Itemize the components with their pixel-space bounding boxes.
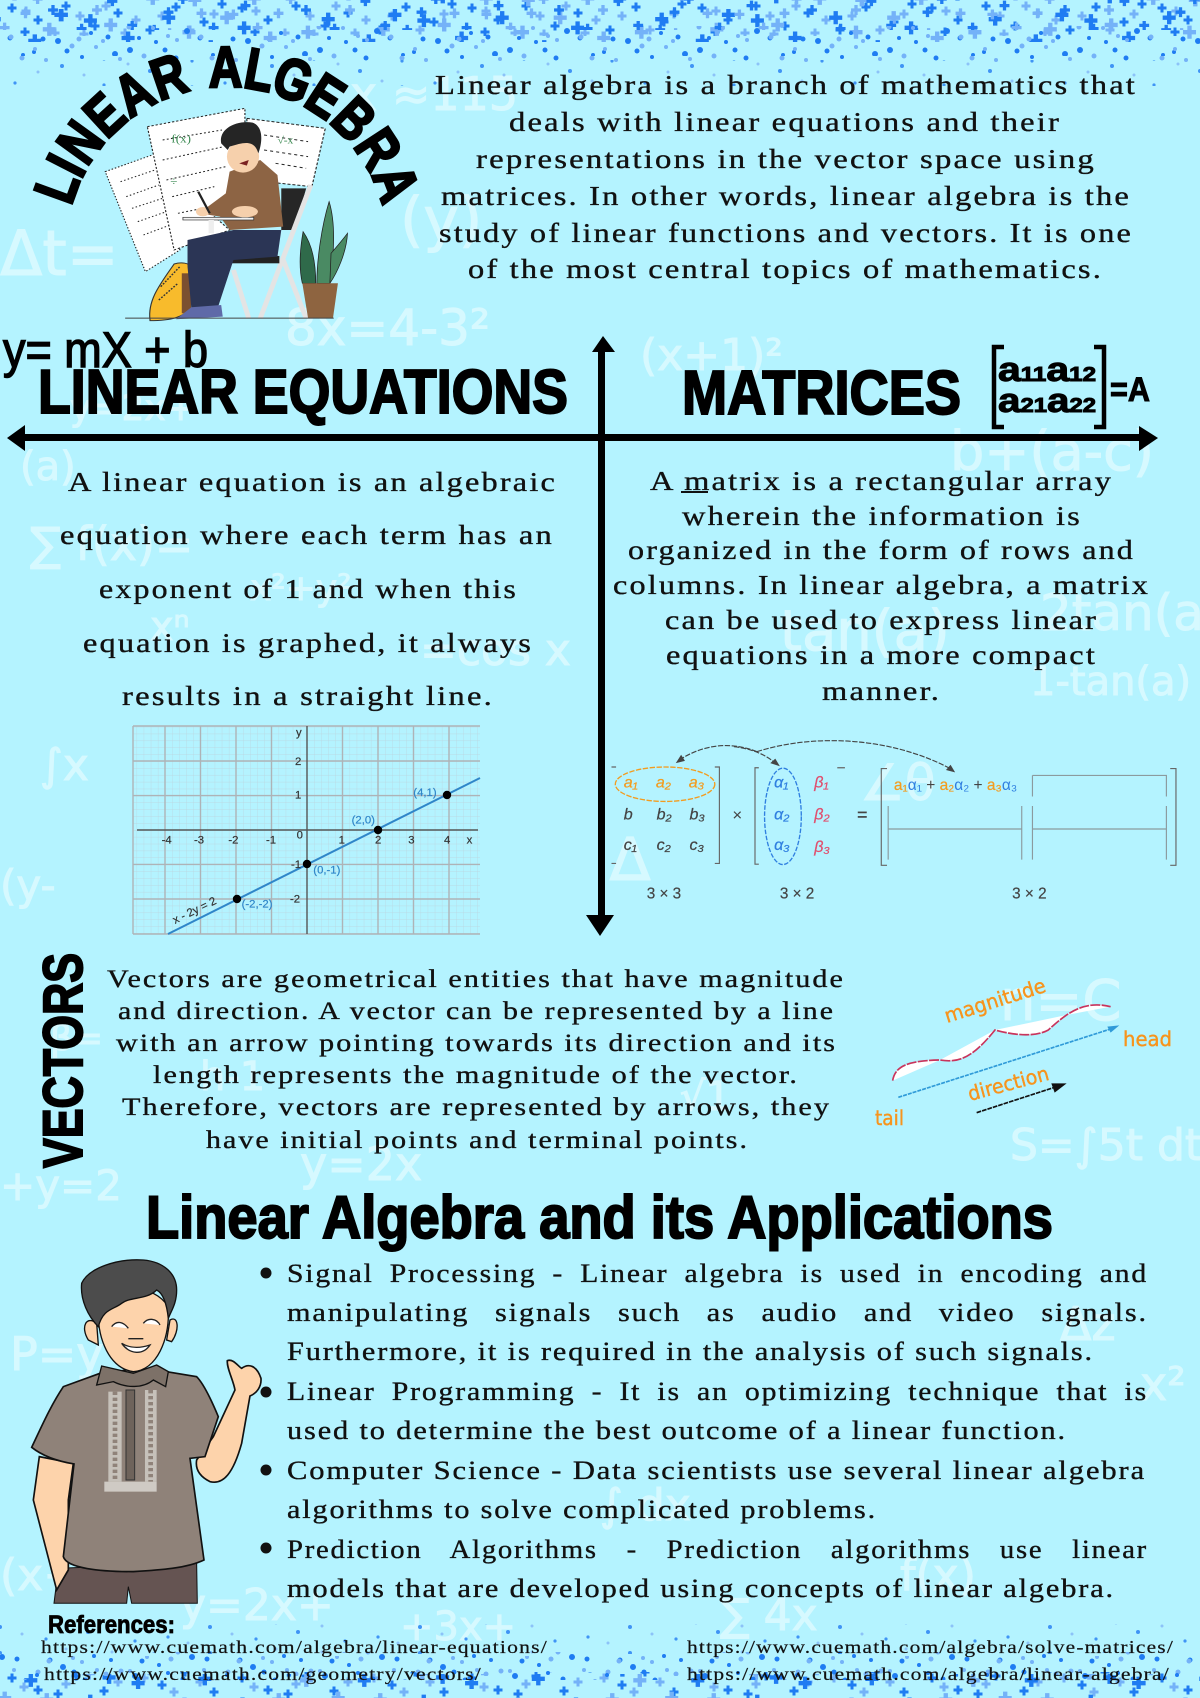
intro paragraph: matrices. In other words, linear algebra is the [441, 181, 1131, 211]
chart: line graph x-2y=2: (2,0) [352, 814, 375, 826]
background: faint handwritten math formulas: +3x+ [400, 1604, 516, 1650]
intro paragraph: study of linear functions and vectors. It is one [439, 218, 1133, 248]
chart: line graph x-2y=2: -1 [266, 834, 276, 846]
background: faint handwritten math formulas: (y) [400, 185, 482, 255]
background: faint handwritten math formulas: S=∫5t dt [1010, 1120, 1200, 1171]
illustration: smiling man thumbs up [32, 1260, 261, 1603]
bullet: signal processing: Furthermore, it is required in the analysis of such signals. [287, 1337, 1094, 1366]
background: faint handwritten math formulas: ∑ f(x)= [30, 517, 193, 571]
background: faint handwritten math formulas: b+(a-c) [950, 420, 1154, 483]
ears [85, 1319, 177, 1345]
paper: right sheet [247, 118, 325, 187]
plant [300, 202, 347, 318]
paragraph: matrix definition: can be used to express linear [665, 605, 1098, 635]
paragraph: linear equation definition: A linear equation is an algebraic [68, 467, 557, 497]
heading: linear equations: LINEAR EQUATIONS [38, 358, 568, 427]
background: faint handwritten math formulas: Δz [1060, 1297, 1116, 1351]
dimension labels: 3 × 3 [647, 886, 681, 903]
matrix: 3x3: b₂ [657, 805, 672, 823]
matrix: result: a₁α₁ + a₂α₂ + a₃α₃ [894, 776, 1017, 794]
matrix: 3x3: c₁ [624, 836, 637, 854]
bullet: signal processing [260, 1259, 1148, 1366]
paper: left sheet [105, 154, 180, 272]
title: curved LINEAR ALGEBRA: G [264, 43, 322, 117]
diagram: matrix multiplication [611, 741, 1176, 903]
background: faint handwritten math formulas: n=C [1000, 969, 1122, 1034]
background: faint handwritten math formulas: xⁿ [150, 604, 190, 650]
ground line [125, 317, 334, 320]
dimension labels [647, 886, 1047, 903]
background: faint handwritten math formulas: (x+1)² [640, 330, 783, 381]
intro paragraph: of the most central topics of mathematics. [468, 254, 1103, 284]
paragraph: vectors definition: have initial points and terminal points. [206, 1127, 749, 1154]
chart: line graph x-2y=2: -4 [162, 834, 172, 846]
title: curved LINEAR ALGEBRA: R [143, 41, 195, 113]
title: curved LINEAR ALGEBRA: E [71, 81, 138, 150]
decoration: bottom speckle band [0, 1624, 1200, 1698]
formula: matrix equals A: =A [1110, 371, 1150, 409]
matrix: 3x3 [611, 767, 719, 863]
paragraph: vectors definition: Vectors are geometrical entities that have magnitude [107, 966, 845, 993]
background: faint handwritten math formulas: =cos x [420, 625, 571, 676]
background: faint handwritten math formulas: β= [50, 1018, 103, 1059]
references heading: References: [48, 1611, 175, 1639]
matrix: 3x3: b [624, 805, 633, 823]
shirt [32, 1368, 218, 1572]
bullet: signal processing: Signal Processing - Linear algebra is used in encoding and [287, 1259, 1148, 1288]
formula: matrix equals A: a21a22 [998, 382, 1096, 420]
formula: y = mx + b: y= mX + b [3, 322, 208, 378]
paragraph: matrix definition: columns. In linear algebra, a matrix [613, 570, 1150, 600]
matrix: 3x3: a₂ [656, 774, 671, 792]
matrix: 3x2 [755, 768, 845, 865]
paragraph: vectors definition: Therefore, vectors are represented by arrows, they [122, 1094, 831, 1121]
background: faint handwritten math formulas: ∫x [40, 740, 89, 791]
vector arrow [898, 1029, 1112, 1097]
chart: line graph x-2y=2: -1 [291, 859, 301, 871]
background: faint handwritten math formulas: ∑ 4x [720, 1590, 818, 1641]
matrix: 3x2: β₁ [813, 774, 829, 792]
chart: line graph x-2y=2: 0 [297, 830, 303, 842]
title: curved LINEAR ALGEBRA: R [342, 117, 414, 181]
background: faint handwritten math formulas: ∫ dx [600, 1480, 691, 1531]
title: curved LINEAR ALGEBRA: E [295, 61, 356, 132]
chart: line graph x-2y=2: (0,-1) [313, 864, 341, 876]
matrix: 3x2: β₂ [813, 805, 830, 823]
chart: line graph x-2y=2: 2 [295, 756, 301, 768]
arrow: vertical axis [586, 336, 615, 936]
backpack [150, 263, 191, 321]
equals sign: = [857, 805, 867, 825]
face [98, 1289, 168, 1372]
bullet: prediction algorithms: models that are developed using concepts of linear algebra. [287, 1574, 1115, 1603]
references links: https://www.cuemath.com/algebra/linear-equations/ [41, 1637, 548, 1657]
bullet: linear programming: used to determine the best outcome of a linear function. [287, 1416, 1067, 1445]
background: faint handwritten math formulas: ∠θ [860, 754, 935, 812]
background: faint handwritten math formulas: h-1 [200, 1054, 265, 1100]
references links [41, 1637, 1174, 1684]
illustration: student at desk with papers and plant [105, 108, 347, 321]
matrix: 3x3: a₁ [624, 774, 638, 792]
paragraph: linear equation definition: equation is graphed, it always [83, 628, 533, 658]
background: faint handwritten math formulas: tan(a) [780, 599, 950, 664]
paragraph: matrix definition: A matrix is a rectangular array [650, 466, 1113, 496]
title: curved LINEAR ALGEBRA: N [45, 110, 117, 175]
chart: line graph x-2y=2: 3 [408, 834, 415, 846]
intro paragraph: representations in the vector space using [476, 144, 1096, 174]
bullet: signal processing: manipulating signals such as audio and video signals. [287, 1298, 1148, 1327]
chart: line graph x-2y=2: -3 [194, 834, 204, 846]
paragraph: vectors definition [107, 966, 845, 1154]
title: curved LINEAR ALGEBRA: B [319, 85, 388, 155]
chart: line graph x-2y=2: y [296, 727, 302, 739]
magnitude curve [893, 1005, 1111, 1081]
paragraph: matrix definition: equations in a more compact [666, 640, 1097, 670]
chart: line graph x-2y=2: (4,1) [413, 787, 437, 799]
background: faint handwritten math formulas: (a) [20, 444, 76, 490]
background: faint handwritten math formulas: +y=2 [0, 1161, 122, 1210]
title: curved LINEAR ALGEBRA: L [22, 162, 93, 211]
background: faint handwritten math formulas: 1-tan(a) [1030, 659, 1191, 705]
chart: line graph x-2y=2: 2 [375, 834, 381, 846]
smile and eyes [112, 1319, 160, 1352]
diagram: vector magnitude and direction: head [1123, 1027, 1172, 1051]
collar [97, 1365, 168, 1387]
bullet: computer science: Computer Science - Data scientists use several linear algebra [287, 1456, 1146, 1485]
intro paragraph: deals with linear equations and their [509, 107, 1061, 137]
chair [232, 185, 311, 318]
heading: vectors (vertical): VECTORS [31, 953, 94, 1168]
paper: centre sheet: f(x) [171, 132, 191, 145]
trousers [188, 230, 281, 308]
bullet: prediction algorithms [260, 1535, 1148, 1603]
paragraph: matrix definition: organized in the form of rows and [628, 535, 1135, 565]
paragraph: linear equation definition: equation where each term has an [60, 520, 554, 550]
paragraph: vectors definition: and direction. A vector can be represented by a line [118, 998, 835, 1025]
arrow: horizontal axis [7, 425, 1158, 451]
diagram: vector magnitude and direction: magnitude [941, 973, 1049, 1028]
list: applications bullets [260, 1259, 1148, 1603]
background: faint handwritten math formulas: y=2x+ [180, 1580, 334, 1631]
bullet: linear programming [260, 1377, 1148, 1445]
chart: line graph x-2y=2 [133, 726, 480, 934]
dimension labels: 3 × 2 [1012, 886, 1047, 903]
diagram: vector magnitude and direction: direction [965, 1061, 1051, 1106]
head [221, 122, 261, 173]
background: faint handwritten math formulas: ∆ [609, 825, 651, 895]
background: faint handwritten math formulas: x ≈115 [350, 67, 518, 121]
background: faint handwritten math formulas: y=2x+ [70, 388, 196, 429]
bullet: computer science: algorithms to solve complicated problems. [287, 1495, 877, 1524]
paper: right sheet: √-x [277, 135, 294, 146]
matrix: 3x2: α₃ [774, 836, 790, 854]
chart: line graph x-2y=2: (-2,-2) [242, 898, 273, 910]
paragraph: vectors definition: length represents the magnitude of the vector. [153, 1062, 799, 1089]
background: faint handwritten math formulas: √1 [680, 1074, 731, 1120]
matrix: 3x3: c₂ [657, 836, 671, 854]
title: curved LINEAR ALGEBRA: A [208, 35, 242, 100]
decoration: top speckle band [0, 0, 1200, 86]
background: faint handwritten math formulas: f(x) [900, 1550, 976, 1601]
background: faint handwritten math formulas: (x+ [0, 1550, 80, 1601]
formula: matrix equals A [994, 347, 1150, 427]
paragraph: vectors definition: with an arrow pointing towards its direction and its [116, 1030, 837, 1057]
diagram: vector magnitude and direction: tail [875, 1106, 904, 1130]
heading: matrices: MATRICES [682, 359, 961, 428]
title: curved LINEAR ALGEBRA: L [240, 36, 279, 105]
heading: applications: Linear Algebra and its Applications [146, 1184, 1053, 1251]
paragraph: linear equation definition: results in a straight line. [122, 681, 494, 711]
title: curved LINEAR ALGEBRA [22, 35, 432, 211]
desk and hands [183, 192, 258, 233]
matrix: 3x2: α₂ [774, 805, 789, 823]
paragraph: matrix definition [613, 466, 1150, 706]
paragraph: matrix definition: manner. [822, 676, 941, 706]
matrix: 3x2: α₁ [774, 774, 788, 792]
chart: line graph x-2y=2: 4 [444, 834, 450, 846]
chart: line graph x-2y=2: -2 [228, 834, 238, 846]
background: faint handwritten math formulas: P=y [10, 1327, 104, 1381]
embroidery and placket [104, 1390, 157, 1492]
background: faint handwritten math formulas: x²+y² [250, 568, 352, 609]
paper: centre sheet [147, 108, 245, 250]
formula: matrix equals A: a11a12 [998, 351, 1096, 389]
references links: https://www.cuemath.com/algebra/linear-algebra/ [687, 1664, 1170, 1684]
background: faint handwritten math formulas: y=2x [300, 1137, 422, 1191]
references links: https://www.cuemath.com/geometry/vectors/ [44, 1664, 482, 1684]
chart: line graph x-2y=2: x [467, 834, 473, 846]
matrix: 3x3: b₃ [690, 805, 705, 823]
paragraph: matrix definition: wherein the information is [682, 501, 1082, 531]
hair [81, 1260, 177, 1327]
background: faint handwritten math formulas: (y- [0, 861, 56, 910]
background: faint handwritten math formulas: x² [1140, 1357, 1186, 1411]
matrix: 3x2: β₃ [813, 838, 830, 856]
left arm [33, 1457, 73, 1590]
bullet: prediction algorithms: Prediction Algorithms - Prediction algorithms use linear [287, 1535, 1148, 1564]
diagram: vector magnitude and direction [875, 973, 1172, 1130]
chart: line graph x-2y=2: -2 [290, 894, 300, 906]
intro paragraph: Linear algebra is a branch of mathematics that [435, 70, 1137, 100]
trousers [54, 1563, 197, 1603]
matrix: 3x3: a₃ [689, 774, 704, 792]
intro paragraph [435, 70, 1137, 284]
paragraph: linear equation definition [60, 467, 557, 711]
chart: line graph x-2y=2: 1 [295, 790, 301, 802]
multiply sign: × [732, 806, 742, 825]
bullet: linear programming: Linear Programming - It is an optimizing technique that is [287, 1377, 1148, 1406]
paragraph: linear equation definition: exponent of 1 and when this [99, 574, 518, 604]
references links: https://www.cuemath.com/algebra/solve-matrices/ [687, 1637, 1174, 1657]
bullet: computer science [260, 1456, 1146, 1524]
matrix: result [881, 769, 1176, 865]
paper: centre sheet: ÷ [170, 175, 178, 188]
background: faint handwritten math formulas: Δt= [0, 217, 119, 290]
direction arrow [977, 1087, 1057, 1113]
sweater [199, 160, 283, 230]
chart: line graph x-2y=2: 1 [339, 834, 345, 846]
dimension labels: 3 × 2 [780, 886, 814, 903]
title: curved LINEAR ALGEBRA: A [359, 156, 432, 211]
title: curved LINEAR ALGEBRA: I [35, 145, 99, 186]
chart: line graph x-2y=2: x - 2y = 2 [171, 895, 218, 927]
matrix: 3x3: c₃ [690, 836, 704, 854]
title: curved LINEAR ALGEBRA: A [103, 57, 165, 130]
shoes [176, 305, 223, 319]
raised arm and hand [196, 1360, 261, 1482]
background: faint handwritten math formulas: 8x=4-3² [285, 299, 490, 357]
curved arrows [676, 741, 955, 772]
